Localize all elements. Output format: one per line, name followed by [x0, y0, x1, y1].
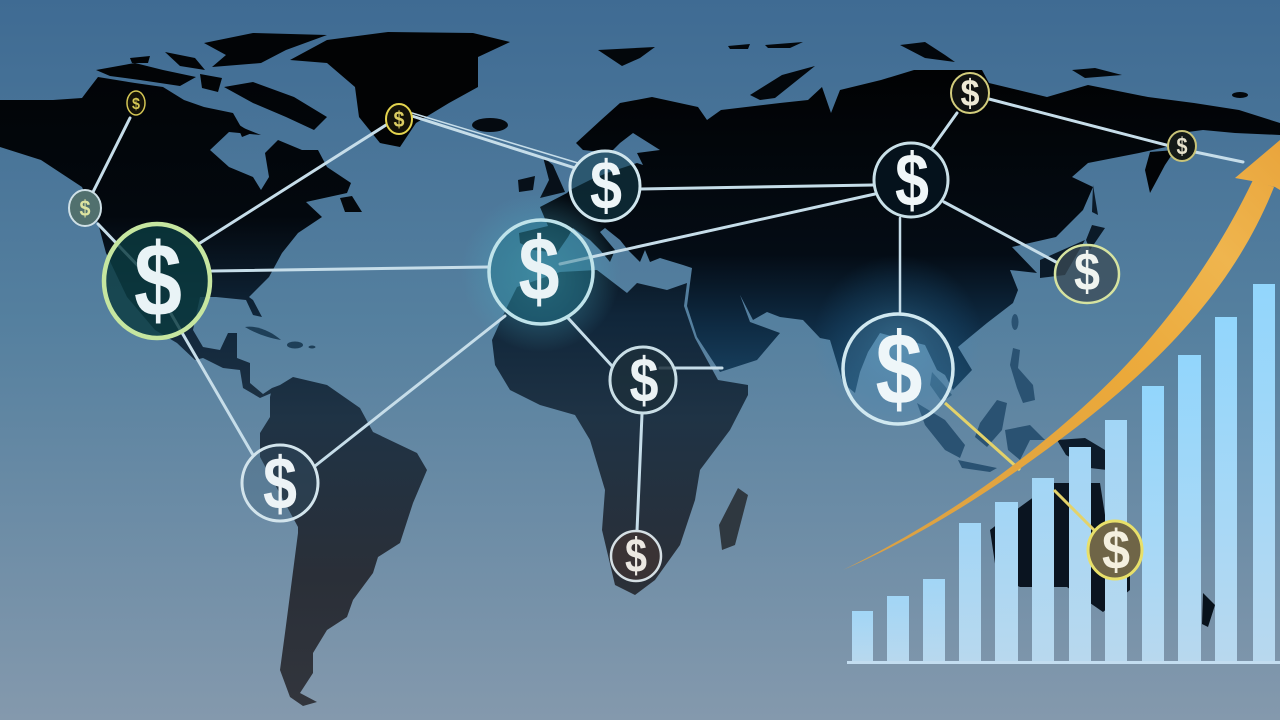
- node: Southeast Asia hub: $: [876, 312, 922, 426]
- node: East Asia: [1055, 242, 1119, 303]
- node: South Africa: [611, 530, 661, 583]
- node: South America: [242, 442, 318, 525]
- continent: South America: [260, 377, 427, 706]
- node: Central Asia: [874, 138, 948, 222]
- islands: Southeast Asia: [917, 314, 1045, 472]
- island: Baffin: [224, 82, 327, 130]
- node: Australia: $: [1102, 518, 1130, 581]
- growth arrow: [843, 140, 1280, 570]
- continent: Eurasia: [519, 70, 1280, 393]
- node: Pacific coast: [69, 190, 101, 226]
- node: North Africa: $: [630, 346, 658, 416]
- islands: Canadian Arctic: [96, 33, 327, 137]
- continent: Africa: [492, 270, 748, 595]
- island: New Guinea: [1057, 438, 1107, 470]
- island: Newfoundland: [340, 196, 362, 212]
- node: Atlantic hub: $: [518, 220, 560, 320]
- node: North America hub: [104, 223, 210, 339]
- continent: Greenland: [290, 32, 510, 147]
- link: yellow connection to Australia: [945, 403, 1094, 530]
- bar chart: [847, 284, 1280, 664]
- node: Greenland: $: [394, 107, 404, 132]
- island: Iceland: [472, 118, 508, 132]
- islands: Arctic Russia: [598, 42, 1248, 100]
- node: Alaska: $: [132, 96, 140, 113]
- node: Kamchatka: [1168, 131, 1196, 161]
- island: Kamchatka: [1145, 150, 1175, 193]
- node: South America: $: [263, 442, 297, 525]
- continent: Australia: [990, 483, 1130, 612]
- islands: Caribbean: [245, 327, 316, 348]
- node: Alaska: [127, 91, 145, 115]
- islands: Britain and Ireland: [518, 157, 565, 198]
- node: Southeast Asia hub: [843, 312, 953, 426]
- node: Atlantic hub: [489, 220, 593, 324]
- island: New Zealand: [1202, 593, 1215, 627]
- node: North America hub: $: [134, 223, 182, 339]
- glow: Southeast Asia hub: [813, 255, 983, 425]
- node: Europe: [570, 147, 640, 224]
- node: Siberia: [951, 73, 989, 115]
- node: Greenland: [386, 104, 412, 134]
- node: North Africa: [610, 346, 676, 416]
- land: Malay peninsula: [930, 372, 952, 402]
- node: East Asia: $: [1074, 242, 1100, 302]
- node: Europe: $: [590, 147, 622, 224]
- continent: North America: [0, 77, 351, 398]
- node: Pacific coast: $: [80, 196, 90, 221]
- island: Sakhalin and Japan: [1040, 185, 1105, 278]
- glow: Atlantic hub: [461, 192, 621, 352]
- node: Kamchatka: $: [1176, 133, 1188, 160]
- node: South Africa: $: [625, 530, 647, 583]
- island: Madagascar: [719, 488, 748, 550]
- node: Central Asia: $: [895, 138, 929, 222]
- node: Siberia: $: [960, 73, 980, 115]
- network links: [93, 99, 1243, 531]
- node: Australia: [1088, 518, 1142, 581]
